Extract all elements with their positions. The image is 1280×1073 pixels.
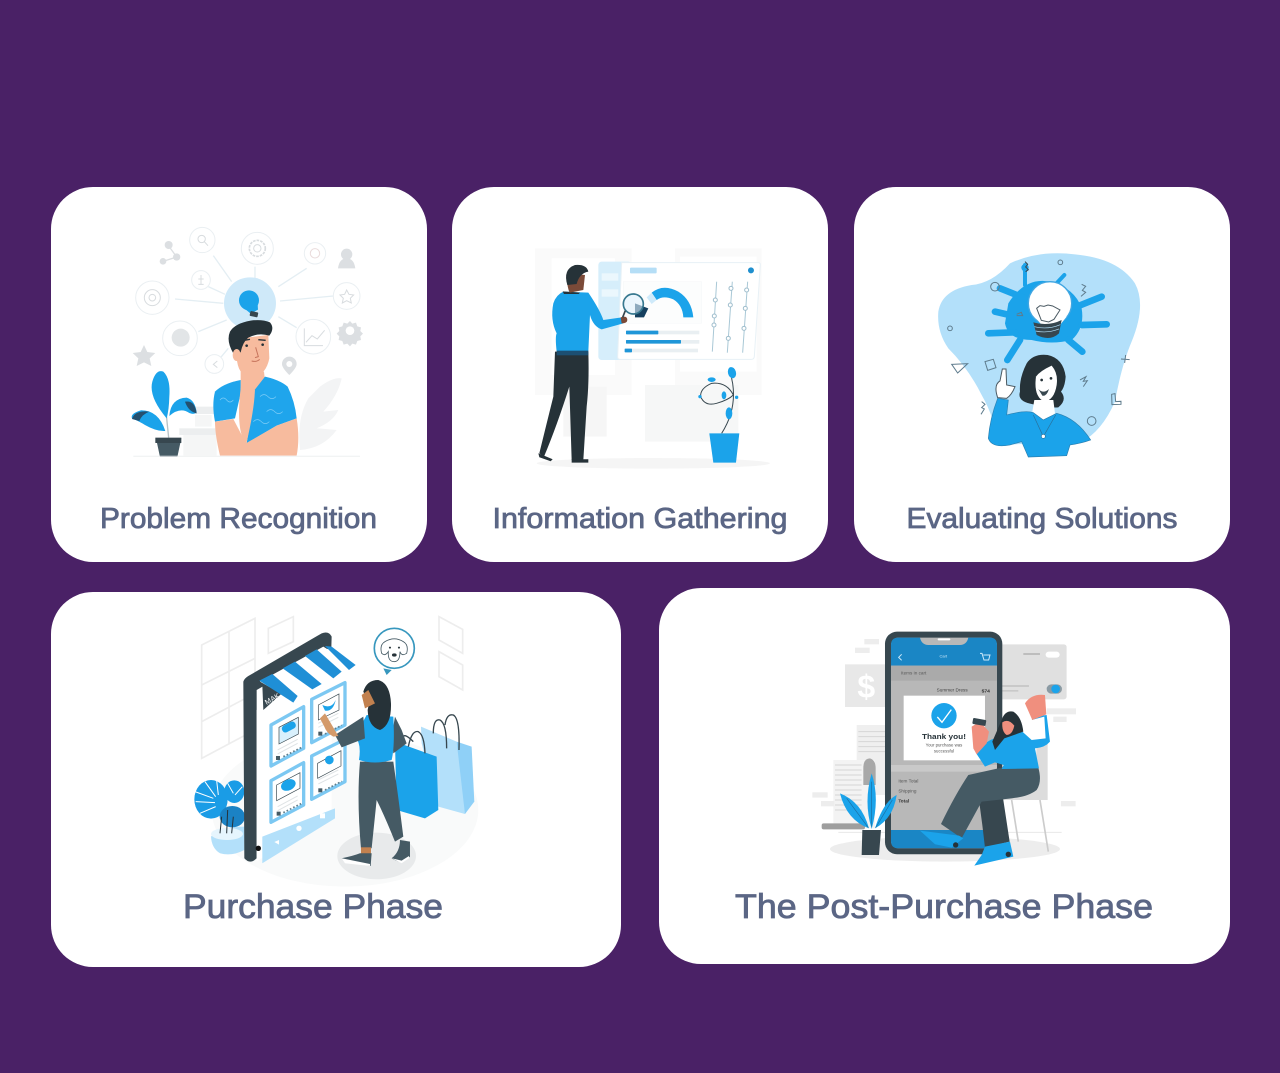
- bulb: [1028, 282, 1072, 338]
- illustration: order confirmation on phone: [812, 632, 1076, 866]
- heading: Problem Recognition: Problem Recognition: [100, 503, 377, 535]
- man: [213, 320, 298, 456]
- shopper: [320, 680, 416, 879]
- thank you dialog: Thank you!: [922, 732, 966, 741]
- phone: Summer Dress: [937, 688, 968, 693]
- background cards: $: [857, 669, 875, 705]
- phone: Cart: [940, 653, 948, 658]
- background leaf: [299, 378, 342, 450]
- panel: Problem Recognition: [51, 187, 427, 562]
- panel: Information Gathering: [452, 187, 828, 562]
- phone: [885, 632, 1002, 854]
- chair: [992, 743, 1048, 852]
- phone: MAK: [263, 691, 282, 707]
- phone: [243, 633, 356, 863]
- heading: The Post-Purchase Phase: The Post-Purchase Phase: [735, 888, 1153, 926]
- awning: [260, 647, 355, 702]
- shopping bags: [395, 715, 474, 818]
- woman: [988, 355, 1091, 457]
- heading: Information Gathering: Information Gathering: [492, 503, 788, 535]
- plant: [840, 773, 897, 855]
- phone: Item Total: [898, 778, 918, 783]
- background cards: [812, 639, 1076, 829]
- blob background: [938, 253, 1140, 445]
- panel: Purchase Phase: [51, 592, 621, 967]
- product cards: [271, 683, 345, 822]
- window and frames: [202, 617, 463, 758]
- panel: Evaluating Solutions: [854, 187, 1230, 562]
- man: [538, 265, 648, 463]
- thank you dialog: [904, 696, 985, 760]
- plant: [132, 371, 197, 457]
- panel: The Post-Purchase Phase: [659, 588, 1230, 964]
- phone: Shipping: [898, 789, 917, 794]
- thank you dialog: successful: [934, 749, 954, 754]
- phone: Items in cart: [901, 670, 927, 675]
- speech bubble: [374, 628, 414, 675]
- faded room: [535, 248, 762, 442]
- phone: $74: [982, 688, 990, 694]
- plant: [698, 366, 739, 463]
- monstera plant: [194, 780, 245, 854]
- phone: Total: [898, 798, 909, 803]
- icon: lightbulb: [239, 290, 259, 317]
- illustration: woman shopping on phone store: [194, 617, 478, 887]
- illustration: woman with idea: [938, 253, 1140, 457]
- heading: Evaluating Solutions: Evaluating Solutions: [906, 503, 1178, 535]
- illustration: thinking man with lightbulb: [132, 227, 363, 457]
- thank you dialog: Your purchase was: [926, 743, 962, 748]
- dashboard: [598, 262, 760, 360]
- splash: [988, 262, 1107, 360]
- books: [179, 407, 218, 456]
- woman: [920, 695, 1050, 866]
- illustration: man analysing dashboard: [535, 248, 770, 469]
- heading: Purchase Phase: Purchase Phase: [183, 888, 443, 926]
